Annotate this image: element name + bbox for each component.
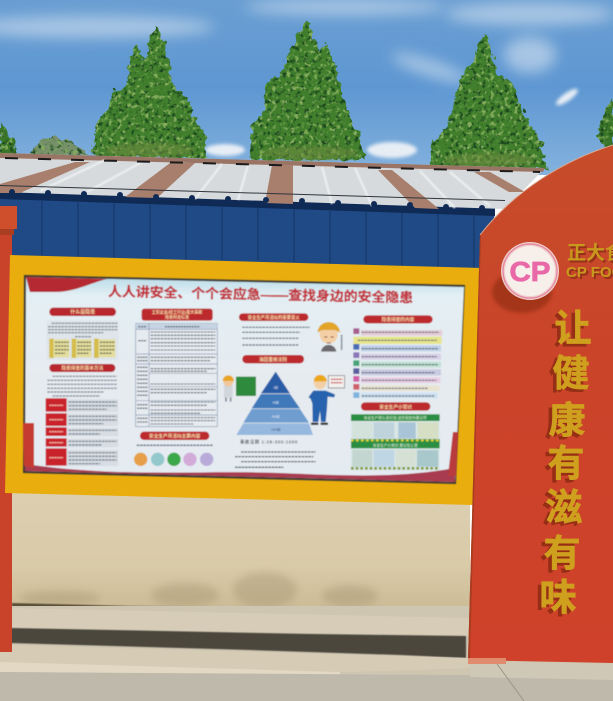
section: safety month significance (239, 313, 310, 345)
red top swoosh (26, 277, 107, 292)
poster title: 人人讲安全、个个会应急——查找身边的安全隐患 (108, 283, 413, 305)
concrete wall (12, 490, 470, 618)
section: Heinrich pyramid: 海因里希法则 (259, 356, 287, 363)
section: inspection methods: 隐患排查的基本方法 (61, 365, 104, 372)
section: safety month significance: 安全生产月活动的重要意义 (248, 314, 300, 321)
slogan: 有 (544, 533, 580, 574)
section: safety tips: 安全生产小常识 要记在心里 (373, 443, 418, 448)
slogan: 味 (536, 580, 572, 621)
section: safety tips: 安全生产那么多红线 这些规定你要记牢 (364, 415, 427, 420)
section: Heinrich pyramid (235, 355, 316, 467)
trees (0, 18, 613, 170)
left poster section (46, 308, 256, 466)
slogan: 健 (552, 353, 590, 394)
slogan (536, 308, 592, 621)
section: major accident hazard table: 隐患判定标准 (165, 314, 189, 320)
section: safety month activities (134, 432, 213, 466)
section: inspection content list: 隐患排查的内容 (382, 316, 415, 323)
pyramid ratio: 事故法则 1:29:300:1000 (240, 439, 298, 446)
pyramid: 300起 (272, 413, 280, 418)
section: major accident hazard table: 工贸企业(轻工行业)重大事故 (152, 309, 202, 315)
right poster section (235, 313, 442, 470)
red arched sign (468, 145, 613, 664)
pyramid (236, 372, 313, 435)
sky (0, 0, 613, 175)
CP logo: CP (510, 256, 550, 287)
left red post (0, 206, 17, 652)
blue metal wall (0, 190, 495, 270)
side red accents (23, 423, 34, 468)
slogan: 康 (544, 403, 582, 444)
slogan: 有 (540, 536, 576, 577)
section: what is a hazard: 什么是隐患 (70, 309, 95, 316)
section: inspection content list (353, 315, 442, 398)
slogan: 滋 (546, 487, 582, 528)
bulletin board (5, 255, 482, 505)
brand name (566, 241, 613, 283)
yellow frame (5, 255, 482, 505)
slogan: 有 (548, 443, 584, 484)
bottom red band (25, 464, 455, 482)
slogan: 滋 (542, 490, 578, 531)
pyramid: 1000起 (271, 427, 280, 432)
slogan: 健 (548, 356, 586, 397)
slogan: 康 (548, 400, 586, 441)
section: what is a hazard (47, 308, 119, 360)
CP logo (501, 242, 559, 300)
section: safety tips: 安全生产小常识 (379, 403, 412, 410)
shadow of CP logo (492, 271, 552, 313)
section: major accident hazard table (136, 309, 217, 427)
poster panel (23, 275, 465, 484)
section: safety tips (351, 402, 440, 470)
small worker with green board (223, 375, 256, 402)
pyramid: 1起 (273, 385, 278, 390)
slogan: 让 (550, 311, 588, 352)
ground (0, 606, 613, 701)
worker with sign (308, 375, 345, 425)
slogan: 让 (554, 308, 592, 349)
section: safety month activities: 安全生产月活动主要内容 (149, 433, 201, 440)
slogan: 有 (544, 446, 580, 487)
tree bases (105, 143, 535, 167)
worker portrait (318, 322, 342, 352)
section: inspection methods (46, 364, 118, 466)
slogan: 味 (540, 577, 576, 618)
activity icons (134, 453, 213, 466)
pyramid: 29起 (273, 399, 279, 404)
corrugated roof (0, 153, 545, 211)
